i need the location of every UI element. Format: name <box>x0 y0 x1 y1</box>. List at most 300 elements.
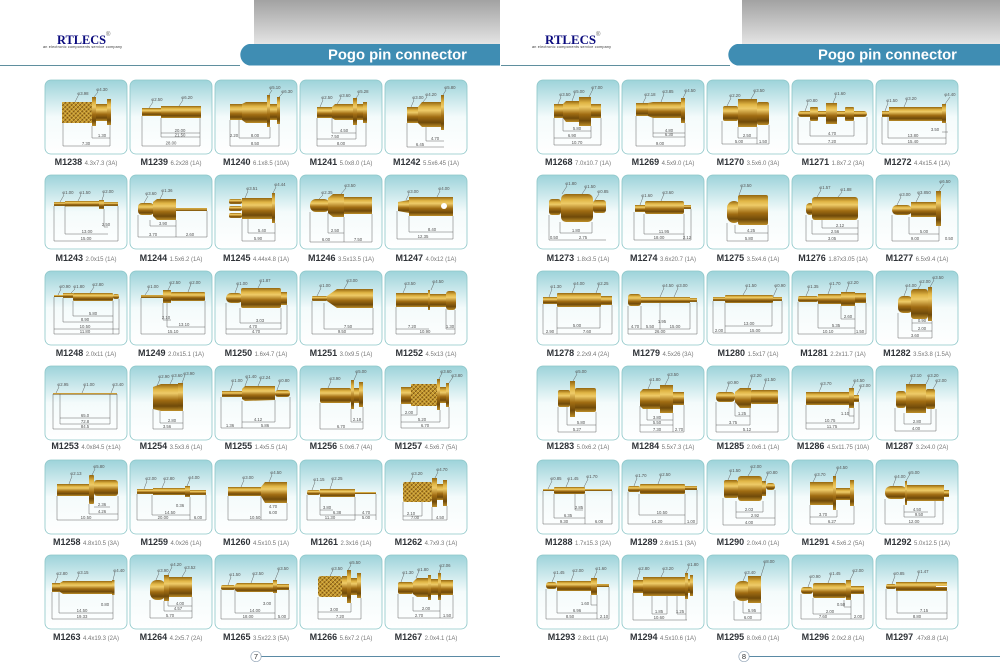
caption M1278: M1278 2.2x9.4 (2A) <box>547 348 609 358</box>
dimensions M1272 <box>882 92 956 144</box>
dimensions M1250: 4.70 <box>249 324 258 329</box>
dimensions M1255: φ0.80 <box>278 378 290 383</box>
dimensions M1243: φ1.50 <box>79 190 91 195</box>
dimensions M1269: 4.80 <box>665 128 674 133</box>
dimensions M1286: φ3.70 <box>820 381 832 386</box>
dimensions M1289: φ2.50 <box>659 472 671 477</box>
dimensions M1274 <box>634 190 692 240</box>
dimensions M1294 <box>633 562 699 620</box>
dimensions M1268: φ5.00 <box>573 89 585 94</box>
caption M1297: M1297 .47x8.8 (1A) <box>886 632 948 642</box>
dimensions M1254: φ3.90 <box>183 371 195 376</box>
pin M1268 <box>554 97 601 126</box>
card: M1263 <box>45 555 127 642</box>
card: M1257 <box>385 366 467 451</box>
dimensions M1276: φ1.88 <box>840 187 852 192</box>
dimensions M1267: 2.00 <box>422 606 431 611</box>
dimensions M1278: φ4.00 <box>573 281 585 286</box>
caption M1247: M1247 4.0x12 (1A) <box>395 253 457 263</box>
dimensions M1281: φ1.35 <box>807 284 819 289</box>
dimensions M1280: φ0.90 <box>774 283 786 288</box>
card: M1262 <box>385 460 467 547</box>
dimensions M1249: 2.10 <box>162 315 171 320</box>
dimensions M1252: φ3.50 <box>404 281 416 286</box>
dimensions M1287: 4.00 <box>912 426 921 431</box>
dimensions M1283: 5.27 <box>573 427 582 432</box>
dimensions M1258: φ2.13 <box>70 471 82 476</box>
dimensions M1292: φ4.00 <box>894 474 906 479</box>
dimensions M1275: 4.25 <box>747 228 756 233</box>
pin M1255 <box>222 386 290 401</box>
dimensions M1262: 7.00 <box>411 515 420 520</box>
dimensions M1257 <box>401 369 463 428</box>
card: M1289 <box>622 460 704 547</box>
caption M1251: M1251 3.0x9.5 (1A) <box>310 348 372 358</box>
dimensions M1294: 1.85 <box>655 609 664 614</box>
dimensions M1277: φ3.850 <box>917 190 931 195</box>
dimensions M1250 <box>226 278 287 334</box>
dimensions M1271: 4.70 <box>828 131 837 136</box>
caption M1284: M1284 5.5x7.3 (1A) <box>632 441 694 451</box>
dimensions M1265 <box>221 566 289 619</box>
dimensions M1253: 84.5 <box>81 424 90 429</box>
dimensions M1295 <box>734 559 775 620</box>
dimensions M1274: 2.12 <box>683 235 692 240</box>
dimensions M1293: 8.50 <box>566 614 575 619</box>
pin M1287 <box>896 384 935 413</box>
caption M1258: M1258 4.8x10.5 (3A) <box>53 537 119 547</box>
dimensions M1296: 2.00 <box>854 614 863 619</box>
card: M1281 <box>792 271 873 358</box>
dimensions M1245: 5.40 <box>258 228 267 233</box>
dimensions M1291: 6.27 <box>828 519 837 524</box>
dimensions M1268: 6.90 <box>568 133 577 138</box>
dimensions M1282: 2.00 <box>918 326 927 331</box>
dimensions M1238 <box>63 87 110 146</box>
dimensions M1291: 3.70 <box>819 512 828 517</box>
dimensions M1288 <box>543 474 612 524</box>
dimensions M1260: φ4.50 <box>270 470 282 475</box>
dimensions M1244: φ1.36 <box>161 188 173 193</box>
pin M1276 <box>806 197 858 220</box>
dimensions M1268: φ7.00 <box>591 85 603 90</box>
dimensions M1268: 10.70 <box>572 140 583 145</box>
dimensions M1257: φ3.60 <box>440 369 452 374</box>
dimensions M1239: 20.00 <box>175 128 186 133</box>
caption M1242: M1242 5.5x6.45 (1A) <box>393 157 459 167</box>
pin M1294 <box>633 573 693 599</box>
dimensions M1246: 2.50 <box>331 228 340 233</box>
dimensions M1295: 6.00 <box>744 615 753 620</box>
dimensions M1274: 11.95 <box>659 229 670 234</box>
dimensions M1264: φ4.20 <box>170 562 182 567</box>
dimensions M1258: 10.50 <box>81 515 92 520</box>
dimensions M1293: 6.96 <box>573 608 582 613</box>
pin M1288 <box>543 487 612 494</box>
dimensions M1267: φ2.06 <box>439 563 451 568</box>
dimensions M1271 <box>798 91 867 144</box>
page 8 header: grey panel <box>742 0 1000 44</box>
dimensions M1244 <box>138 188 207 237</box>
card: M1296 <box>792 555 873 642</box>
caption M1272: M1272 4.4x15.4 (1A) <box>884 157 950 167</box>
caption M1240: M1240 6.1x8.5 (10A) <box>223 157 289 167</box>
dimensions M1264: φ3.90 <box>157 568 169 573</box>
dimensions M1272: 15.40 <box>908 139 919 144</box>
dimensions M1267: φ1.30 <box>402 570 414 575</box>
dimensions M1265: 5.00 <box>278 614 287 619</box>
dimensions M1246: 6.00 <box>322 237 331 242</box>
pin M1248 <box>54 293 119 301</box>
card: M1290 <box>707 460 789 547</box>
dimensions M1285 <box>716 373 778 432</box>
dimensions M1239: φ2.50 <box>151 97 163 102</box>
card: M1292 <box>876 460 958 547</box>
dimensions M1273: φ1.80 <box>565 181 577 186</box>
dimensions M1259: 0.36 <box>176 503 185 508</box>
dimensions M1265: φ2.50 <box>252 571 264 576</box>
card: M1285 <box>707 366 789 451</box>
dimensions M1268: φ3.50 <box>559 92 571 97</box>
caption M1257: M1257 4.5x6.7 (5A) <box>395 441 457 451</box>
page 8 header: title bar <box>728 44 1000 66</box>
dimensions M1282: φ3.50 <box>932 275 944 280</box>
dimensions M1255: φ2.24 <box>259 375 271 380</box>
dimensions M1270: φ2.20 <box>729 93 741 98</box>
pin M1252 <box>396 290 456 310</box>
dimensions M1243: φ1.00 <box>62 190 74 195</box>
caption M1266: M1266 5.6x7.2 (1A) <box>310 632 372 642</box>
card: M1261 <box>300 460 382 547</box>
dimensions M1269: φ3.85 <box>662 89 674 94</box>
caption M1239: M1239 6.2x28 (1A) <box>140 157 202 167</box>
dimensions M1290: φ1.50 <box>729 468 741 473</box>
caption M1256: M1256 5.0x6.7 (4A) <box>310 441 372 451</box>
card: M1272 <box>876 80 958 167</box>
dimensions M1277: φ3.00 <box>899 192 911 197</box>
pin M1284 <box>640 385 684 413</box>
dimensions M1295: 5.95 <box>748 608 757 613</box>
pin M1239 <box>142 106 201 118</box>
dimensions M1248: 10.50 <box>80 324 91 329</box>
dimensions M1248: 11.80 <box>80 329 91 334</box>
dimensions M1259: φ4.00 <box>188 475 200 480</box>
dimensions M1288: 6.35 <box>564 513 573 518</box>
dimensions M1277: 9.00 <box>911 236 920 241</box>
dimensions M1288: 2.85 <box>575 505 584 510</box>
page 7 logo: ® <box>106 31 111 38</box>
dimensions M1253 <box>53 382 124 429</box>
dimensions M1278: φ1.30 <box>550 284 562 289</box>
dimensions M1252: 1.30 <box>446 324 455 329</box>
dimensions M1249: 13.10 <box>179 322 190 327</box>
caption M1286: M1286 4.5x11.75 (10A) <box>797 441 869 451</box>
dimensions M1261: φ1.15 <box>313 477 325 482</box>
caption M1253: M1253 4.0x84.5 (±1A) <box>51 441 121 451</box>
dimensions M1241: 7.50 <box>331 134 340 139</box>
dimensions M1253: φ1.00 <box>83 382 95 387</box>
dimensions M1291 <box>810 465 854 524</box>
pin M1291 <box>810 476 854 510</box>
dimensions M1272: φ1.50 <box>886 98 898 103</box>
dimensions M1253: φ2.95 <box>57 382 69 387</box>
dimensions M1286 <box>806 378 871 429</box>
caption M1268: M1268 7.0x10.7 (1A) <box>545 157 611 167</box>
caption M1254: M1254 3.5x3.6 (1A) <box>140 441 202 451</box>
dimensions M1297: φ0.85 <box>893 571 905 576</box>
dimensions M1244: 2.60 <box>186 232 195 237</box>
dimensions M1248: φ1.80 <box>73 284 85 289</box>
page 7 footer with number <box>40 651 500 662</box>
dimensions M1258: 2.36 <box>98 502 107 507</box>
dimensions M1256 <box>320 369 367 429</box>
page 8 footer with number <box>512 651 1000 662</box>
dimensions M1292: φ5.00 <box>908 470 920 475</box>
card: M1294 <box>622 555 704 642</box>
dimensions M1255: 4.12 <box>254 417 263 422</box>
dimensions M1281: φ2.20 <box>847 280 859 285</box>
dimensions M1261: φ2.25 <box>331 476 343 481</box>
caption M1259: M1259 4.0x26 (1A) <box>140 537 202 547</box>
dimensions M1255: 1.36 <box>226 423 235 428</box>
card: M1246 <box>300 175 382 263</box>
pin M1253 <box>53 393 117 394</box>
dimensions M1263: φ4.40 <box>113 568 125 573</box>
card: M1286 <box>792 366 873 451</box>
dimensions M1263: 0.80 <box>101 602 110 607</box>
dimensions M1267: 1.50 <box>443 613 452 618</box>
dimensions M1290: φ0.80 <box>766 470 778 475</box>
card: M1269 <box>622 80 704 167</box>
dimensions M1259: φ2.80 <box>163 476 175 481</box>
dimensions M1255: φ1.00 <box>231 378 243 383</box>
dimensions M1293: φ1.45 <box>553 570 565 575</box>
card: M1260 <box>215 460 297 547</box>
dimensions M1248: φ0.90 <box>59 284 71 289</box>
dimensions M1263: φ3.15 <box>77 570 89 575</box>
page 8 logo: RTLECS <box>545 32 596 47</box>
dimensions M1296: 7.60 <box>819 614 828 619</box>
dimensions M1287 <box>895 373 947 431</box>
caption M1248: M1248 2.0x11 (1A) <box>56 348 116 358</box>
dimensions M1287: 2.80 <box>913 419 922 424</box>
pin M1245 <box>229 193 275 223</box>
dimensions M1258: φ5.80 <box>93 464 105 469</box>
dimensions M1239 <box>142 95 200 146</box>
dimensions M1253: 65.0 <box>81 413 90 418</box>
card: M1293 <box>537 555 619 642</box>
dimensions M1282: 3.60 <box>911 333 920 338</box>
dimensions M1296 <box>801 568 864 619</box>
dimensions M1242: φ5.80 <box>444 85 456 90</box>
dimensions M1265: φ3.50 <box>277 566 289 571</box>
pin M1296 <box>801 580 864 600</box>
card: M1284 <box>622 366 704 451</box>
dimensions M1242: φ3.00 <box>412 95 424 100</box>
dimensions M1265: 3.00 <box>263 601 272 606</box>
dimensions M1251: 9.50 <box>338 329 347 334</box>
dimensions M1245: φ4.44 <box>274 182 286 187</box>
caption M1296: M1296 2.0x2.8 (1A) <box>802 632 864 642</box>
dimensions M1257: 2.00 <box>405 410 414 415</box>
caption M1295: M1295 8.0x6.0 (1A) <box>717 632 779 642</box>
dimensions M1285: 5.12 <box>743 427 752 432</box>
caption M1275: M1275 3.5x4.6 (1A) <box>717 253 779 263</box>
dimensions M1262: φ3.20 <box>411 471 423 476</box>
pin M1256 <box>320 380 363 409</box>
pin M1280 <box>713 295 782 303</box>
caption M1293: M1293 2.8x11 (1A) <box>548 632 608 642</box>
pin M1282 <box>898 287 932 321</box>
page 7 footer with number: 7 <box>254 652 258 661</box>
dimensions M1279: 4.70 <box>631 324 640 329</box>
caption M1287: M1287 3.2x4.0 (2A) <box>886 441 948 451</box>
pin M1246 <box>310 194 372 217</box>
dimensions M1276: 3.05 <box>828 236 837 241</box>
dimensions M1254: φ3.60 <box>171 373 183 378</box>
dimensions M1243: φ2.00 <box>102 189 114 194</box>
card: M1247 <box>385 175 467 263</box>
dimensions M1265: 14.00 <box>250 608 261 613</box>
dimensions M1274: 18.00 <box>654 235 665 240</box>
page 8 header: title bar: Pogo pin connector <box>818 48 957 64</box>
dimensions M1244: 3.90 <box>159 221 168 226</box>
card: M1266 <box>300 555 382 642</box>
card: M1275 <box>707 175 789 263</box>
dimensions M1265: φ1.50 <box>229 572 241 577</box>
dimensions M1267: φ1.80 <box>417 567 429 572</box>
dimensions M1293: φ2.00 <box>572 568 584 573</box>
dimensions M1240: 8.50 <box>251 141 260 146</box>
dimensions M1257: 5.20 <box>418 417 427 422</box>
dimensions M1291: φ3.70 <box>814 472 826 477</box>
caption M1260: M1260 4.5x10.5 (1A) <box>223 537 289 547</box>
dimensions M1256: 6.70 <box>337 424 346 429</box>
dimensions M1241 <box>317 89 369 146</box>
dimensions M1259 <box>137 475 206 520</box>
dimensions M1290: φ2.00 <box>750 464 762 469</box>
pin M1243 <box>54 200 118 209</box>
dimensions M1269: 9.00 <box>656 141 665 146</box>
dimensions M1266: φ5.50 <box>349 560 361 565</box>
dimensions M1239: 28.00 <box>166 140 177 146</box>
dimensions M1283: φ5.00 <box>575 369 587 374</box>
dimensions M1248: φ2.80 <box>92 282 104 287</box>
dimensions M1296: φ2.00 <box>852 568 864 573</box>
dimensions M1249: φ2.50 <box>169 280 181 285</box>
pin M1261 <box>307 489 376 497</box>
caption M1267: M1267 2.0x4.1 (1A) <box>395 632 457 642</box>
dimensions M1292 <box>885 470 943 524</box>
dimensions M1264: 4.57 <box>174 606 183 611</box>
dimensions M1284: 2.70 <box>675 427 684 432</box>
dimensions M1256: φ5.00 <box>355 369 367 374</box>
pin M1295 <box>735 576 761 603</box>
caption M1245: M1245 4.44x4.8 (1A) <box>223 253 289 263</box>
dimensions M1289: 14.20 <box>652 519 663 524</box>
dimensions M1269: φ2.18 <box>644 92 656 97</box>
dimensions M1246: 7.50 <box>354 237 363 242</box>
dimensions M1254 <box>153 371 195 429</box>
dimensions M1259: 6.00 <box>194 515 203 520</box>
pin M1270 <box>723 99 769 127</box>
dimensions M1288: 9.30 <box>560 519 569 524</box>
caption M1238: M1238 4.3x7.3 (3A) <box>55 157 117 167</box>
caption M1281: M1281 2.2x11.7 (1A) <box>800 348 866 358</box>
dimensions M1285: φ1.50 <box>764 377 776 382</box>
dimensions M1294: φ1.80 <box>687 562 699 567</box>
dimensions M1248 <box>54 282 119 334</box>
dimensions M1294: 10.60 <box>654 615 665 620</box>
dimensions M1258: 4.26 <box>98 509 107 514</box>
dimensions M1279: 1.95 <box>658 319 667 324</box>
card: M1280 <box>707 271 789 358</box>
pin M1271 <box>798 103 867 124</box>
dimensions M1290: 4.00 <box>745 520 754 525</box>
dimensions M1245: φ3.51 <box>246 186 258 191</box>
dimensions M1246: φ2.35 <box>321 190 333 195</box>
dimensions M1262: φ4.70 <box>436 467 448 472</box>
dimensions M1275 <box>727 183 768 241</box>
pin M1281 <box>798 292 866 306</box>
dimensions M1268 <box>554 85 603 145</box>
dimensions M1247: φ3.00 <box>407 189 419 194</box>
dimensions M1294: φ2.80 <box>638 566 650 571</box>
dimensions M1279: φ3.00 <box>676 283 688 288</box>
card: M1271 <box>792 80 873 167</box>
dimensions M1297: φ1.47 <box>917 569 929 574</box>
page 7 header rule <box>0 64 240 66</box>
card: M1279 <box>622 271 704 358</box>
dimensions M1241: 4.50 <box>340 128 349 133</box>
dimensions M1240 <box>230 85 293 146</box>
dimensions M1242 <box>407 85 456 147</box>
dimensions M1292: 9.50 <box>915 512 924 517</box>
dimensions M1253: φ3.40 <box>112 382 124 387</box>
page 7 header: title bar: Pogo pin connector <box>328 48 467 64</box>
dimensions M1295: φ3.40 <box>744 570 756 575</box>
dimensions M1273: φ1.50 <box>584 184 596 189</box>
dimensions M1276: 2.12 <box>836 223 845 228</box>
pin M1254 <box>153 383 183 411</box>
dimensions M1285: 1.25 <box>738 411 747 416</box>
dimensions M1252 <box>396 279 455 334</box>
pin M1283 <box>558 381 596 417</box>
dimensions M1279: 26.00 <box>655 329 666 334</box>
dimensions M1282 <box>898 275 944 338</box>
dimensions M1276: 2.56 <box>831 229 840 234</box>
dimensions M1260: φ3.00 <box>242 475 254 480</box>
dimensions M1290 <box>723 464 778 525</box>
dimensions M1281: 2.60 <box>844 314 853 319</box>
caption M1280: M1280 1.5x17 (1A) <box>717 348 779 358</box>
dimensions M1249: 15.10 <box>168 329 179 334</box>
dimensions M1240: φ5.10 <box>269 85 281 90</box>
dimensions M1257: φ3.80 <box>451 373 463 378</box>
card: M1251 <box>300 271 382 358</box>
dimensions M1241: φ3.60 <box>339 93 351 98</box>
dimensions M1274: φ1.60 <box>641 193 653 198</box>
dimensions M1261: 3.80 <box>323 505 332 510</box>
dimensions M1251: 7.50 <box>344 324 353 329</box>
card: M1270 <box>707 80 789 167</box>
dimensions M1286: 10.75 <box>825 418 836 423</box>
dimensions M1267: 2.70 <box>415 613 424 618</box>
dimensions M1258 <box>57 464 118 520</box>
dimensions M1243: 2.50 <box>102 222 111 227</box>
dimensions M1280: φ1.50 <box>745 283 757 288</box>
caption M1288: M1288 1.7x15.3 (2A) <box>545 537 611 547</box>
